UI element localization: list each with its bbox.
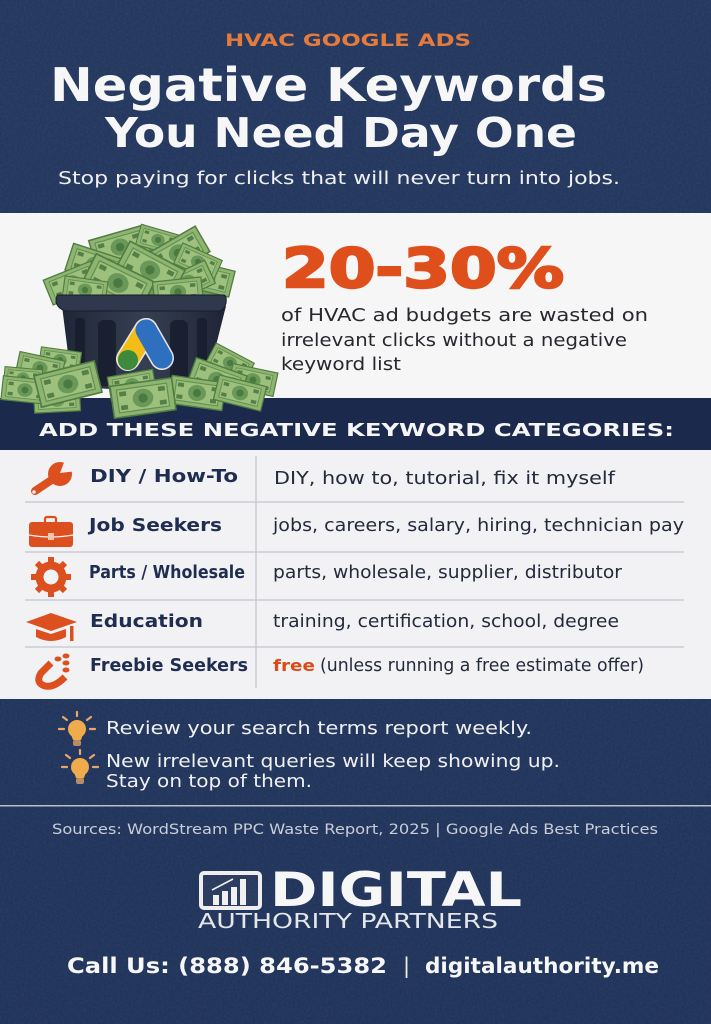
tip: stay on top: New irrelevant queries will keep showing up. xyxy=(106,751,560,772)
band: categories heading: ADD THESE NEGATIVE KEYWORD CATEGORIES: xyxy=(39,420,674,441)
eyebrow: HVAC GOOGLE ADS xyxy=(225,31,471,51)
icon: wrench xyxy=(32,460,78,494)
row: DIY: DIY / How-To xyxy=(90,466,238,487)
money heap xyxy=(43,224,235,312)
icon: light bulb xyxy=(59,712,95,746)
logo: AUTHORITY PARTNERS xyxy=(198,909,498,933)
illustration: bucket of money xyxy=(1,224,278,418)
row: Freebie Seekers: free xyxy=(273,656,315,675)
statistic description: of HVAC ad budgets are wasted on xyxy=(281,305,648,326)
row: Job Seekers: jobs, careers, salary, hiring, technician pay xyxy=(272,515,684,536)
panel: waste stat xyxy=(0,213,711,398)
logo xyxy=(198,863,522,933)
money pile xyxy=(1,343,278,418)
tip: review weekly: Review your search terms report weekly. xyxy=(106,718,532,739)
title: You Need Day One xyxy=(104,109,577,157)
icon: chart box xyxy=(201,873,260,908)
icon: gear xyxy=(31,557,71,597)
title xyxy=(50,58,607,157)
icon: magnet xyxy=(39,654,70,686)
icon: briefcase xyxy=(29,517,73,547)
row: Education: training, certification, school, degree xyxy=(273,611,619,632)
row: Education: Education xyxy=(90,611,203,632)
bucket xyxy=(56,295,226,390)
sources: Sources: WordStream PPC Waste Report, 2025 | Google Ads Best Practices xyxy=(52,822,658,838)
statistic description: keyword list xyxy=(281,354,401,375)
row: Job Seekers xyxy=(29,515,684,547)
statistic: 20-30% xyxy=(282,237,564,300)
logo: DIGITAL xyxy=(270,863,522,918)
statistic description: irrelevant clicks without a negative xyxy=(281,330,627,351)
contact line: digitalauthority.me xyxy=(425,954,659,978)
header panel xyxy=(50,31,620,189)
row: Job Seekers: Job Seekers xyxy=(87,515,222,536)
row: Parts: Parts / Wholesale xyxy=(89,562,245,583)
row: DIY xyxy=(32,460,616,494)
icon: Google Ads logo xyxy=(118,330,162,370)
row: Freebie Seekers: Freebie Seekers xyxy=(90,655,248,676)
statistic description xyxy=(281,305,648,375)
icon: light bulb xyxy=(62,750,98,784)
band: categories heading xyxy=(0,398,711,450)
row: Parts: parts, wholesale, supplier, distributor xyxy=(273,562,623,583)
icon: graduation cap xyxy=(26,613,77,641)
row: Freebie Seekers: (unless running a free estimate offer) xyxy=(320,655,644,676)
contact line: | xyxy=(403,954,410,979)
tip: stay on top xyxy=(62,750,560,792)
panel: keyword table xyxy=(0,450,711,699)
contact line xyxy=(67,954,659,979)
row: Freebie Seekers xyxy=(39,654,644,686)
row: Parts xyxy=(31,557,623,597)
row: Education xyxy=(26,611,619,641)
row: DIY: DIY, how to, tutorial, fix it myself xyxy=(274,468,616,489)
contact line: Call Us: (888) 846-5382 xyxy=(67,954,387,978)
subtitle: Stop paying for clicks that will never turn into jobs. xyxy=(58,168,620,189)
tip: stay on top: Stay on top of them. xyxy=(106,771,312,792)
title: Negative Keywords xyxy=(50,58,607,112)
tip: review weekly xyxy=(59,712,532,746)
